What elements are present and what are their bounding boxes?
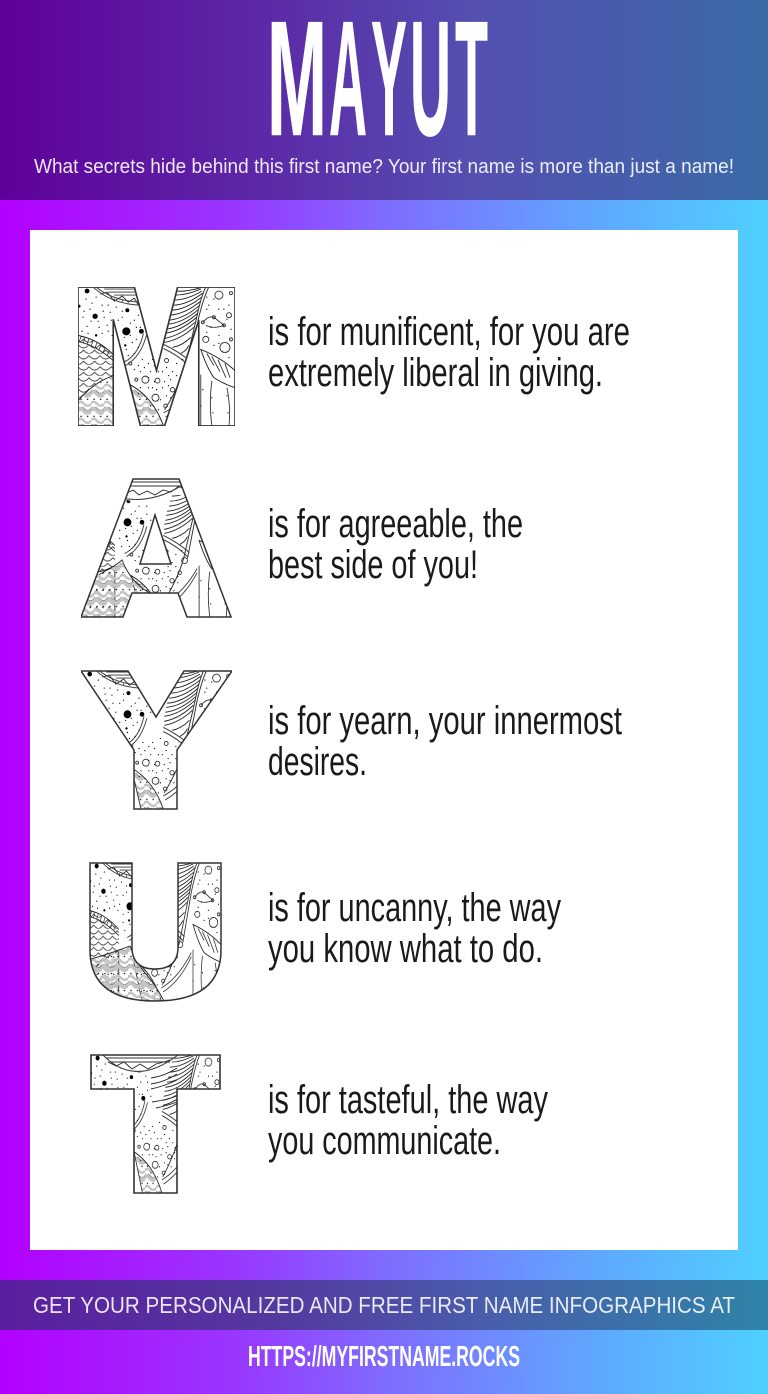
icon: letter T [90, 1054, 221, 1194]
footer url: HTTPS://MYFIRSTNAME.ROCKS [248, 1341, 520, 1373]
icon: letter A [81, 478, 232, 618]
white content panel [30, 230, 738, 1250]
footer band [0, 1280, 768, 1330]
text: A meaning: is for agreeable, the [268, 502, 523, 546]
row T [90, 1054, 548, 1194]
row Y [81, 670, 622, 810]
text: M meaning [268, 310, 630, 395]
header band [0, 0, 768, 200]
subtitle: What secrets hide behind this first name? Your first name is more than just a name! [34, 156, 734, 178]
text: T meaning: you communicate. [268, 1119, 501, 1163]
text: A meaning [268, 502, 523, 587]
icon: letter Y [81, 670, 232, 810]
text: U meaning: you know what to do. [268, 927, 543, 971]
text: Y meaning [268, 699, 622, 784]
text: U meaning [268, 886, 561, 971]
row M [78, 287, 630, 426]
title [267, 0, 488, 145]
icon: letter U [89, 862, 222, 1002]
icon: letter M [78, 287, 235, 426]
row A [81, 478, 523, 618]
text: A meaning: best side of you! [268, 543, 478, 587]
text: Y meaning: desires. [268, 740, 367, 784]
row U [89, 862, 561, 1002]
text: T meaning [268, 1078, 548, 1163]
